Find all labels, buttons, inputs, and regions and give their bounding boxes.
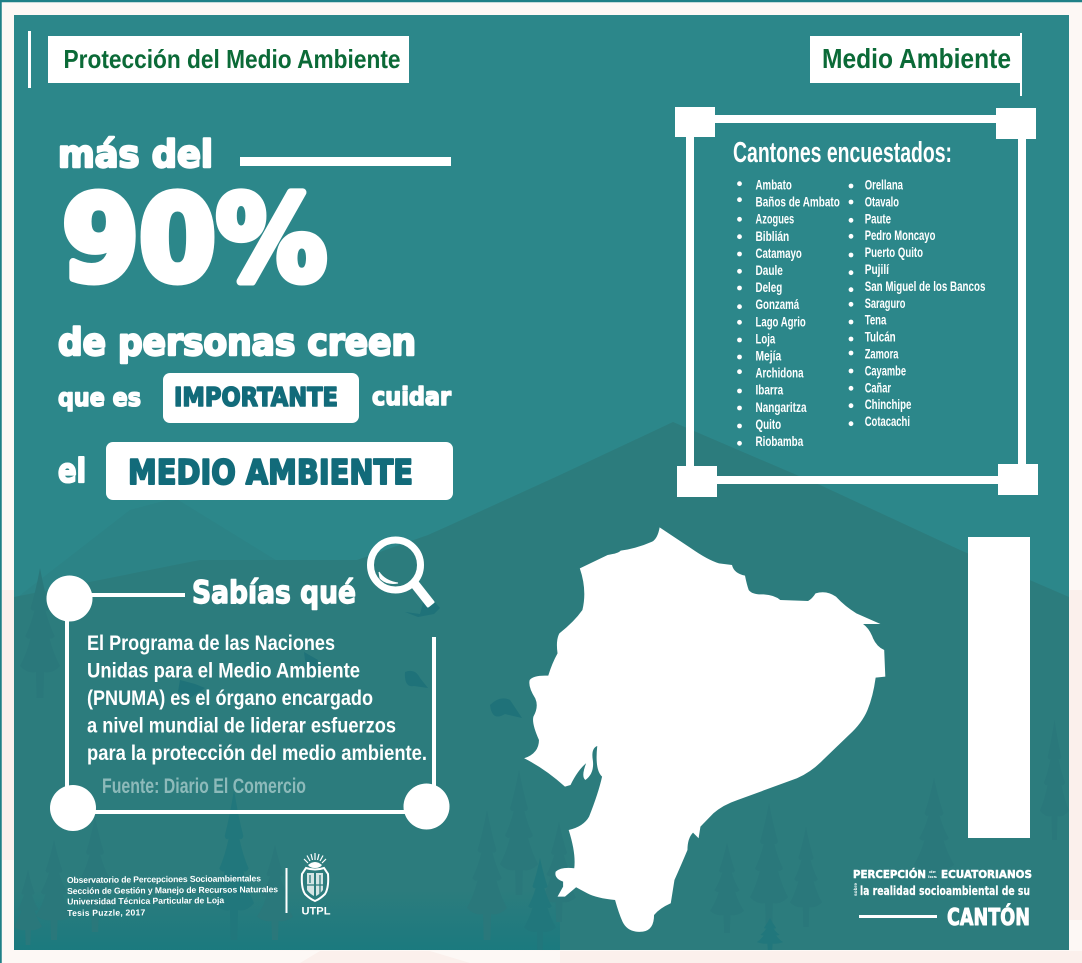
list: second column: Chinchipe xyxy=(865,396,912,412)
list: second column: Tulcán xyxy=(865,329,896,345)
list: second column: Pedro Moncayo xyxy=(865,227,935,243)
logo: UTPL xyxy=(302,853,331,918)
list: first column: Ibarra xyxy=(756,382,783,398)
footer credits xyxy=(67,873,279,918)
series title: Percepción de los ecuatorianos: ECUATORIANOS xyxy=(941,868,1032,881)
text block: PNUMA: El Programa de las Naciones xyxy=(87,632,335,655)
list: second column: Pujilí xyxy=(865,261,890,277)
list: first column: Biblián xyxy=(756,228,789,244)
heading: Protección del Medio Ambiente xyxy=(48,36,409,83)
list: first column: Gonzamá xyxy=(756,296,799,312)
dark foreground trees xyxy=(214,790,783,950)
list: first column: Catamayo xyxy=(756,245,802,261)
list: second column: Orellana xyxy=(865,176,903,192)
heading: Protección del Medio Ambiente: Protección del Medio Ambiente xyxy=(64,44,400,74)
series title: Percepción de los ecuatorianos: sobre xyxy=(853,882,858,896)
series title: Percepción de los ecuatorianos: los xyxy=(928,874,938,879)
list: second column: Cañar xyxy=(865,379,891,395)
series title: Percepción de los ecuatorianos: la realidad socioambiental de su xyxy=(860,884,1030,898)
list: first column: Daule xyxy=(756,262,783,278)
list: first column: Quito xyxy=(756,416,781,432)
text block: PNUMA: a nivel mundial de liderar esfuerzos xyxy=(87,714,396,738)
list: first column: Azogues xyxy=(756,211,794,227)
background trees xyxy=(14,568,1069,945)
list: second column: Tena xyxy=(865,312,887,328)
list: second column: Cotacachi xyxy=(865,413,910,429)
list heading: Cantones encuestados: xyxy=(733,137,952,169)
list: first column: Loja xyxy=(756,330,775,346)
panel: Sabías qué xyxy=(46,540,450,831)
callout frame xyxy=(46,576,450,831)
text block: PNUMA: para la protección del medio ambiente. xyxy=(87,742,427,765)
background birds xyxy=(178,592,522,718)
heading: Sabías qué: Sabías qué xyxy=(192,575,356,611)
left accent bar xyxy=(28,31,31,88)
footer divider xyxy=(286,868,288,913)
list: first column: Baños de Ambato xyxy=(756,194,840,210)
logo: UTPL: UTPL xyxy=(302,906,331,918)
series title: Percepción de los ecuatorianos: PERCEPCIÓN xyxy=(853,868,926,881)
series title: Percepción de los ecuatorianos: de xyxy=(929,869,937,874)
series title: Percepción de los ecuatorianos: CANTÓN xyxy=(947,903,1030,931)
list: second column: Cayambe xyxy=(865,362,906,378)
map: Ecuador xyxy=(524,527,885,932)
statement: el medio ambiente: MEDIO AMBIENTE xyxy=(128,453,413,493)
background mountains xyxy=(14,422,1069,950)
text block: PNUMA xyxy=(87,632,427,765)
footer credits: Universidad Técnica Particular de Loja xyxy=(67,895,224,906)
list frame xyxy=(675,107,1038,497)
heading: Medio Ambiente xyxy=(810,33,1022,96)
text block: PNUMA: Unidas para el Medio Ambiente xyxy=(87,660,360,682)
lower panel tint xyxy=(14,890,560,950)
blank white column xyxy=(968,537,1030,838)
list: second column: Otavalo xyxy=(865,193,899,209)
list: first column xyxy=(756,176,840,449)
statement: el medio ambiente xyxy=(58,442,453,500)
footer credits: Observatorio de Percepciones Socioambientales xyxy=(67,873,261,885)
list: second column: Puerto Quito xyxy=(865,244,923,260)
list: first column: Nangaritza xyxy=(756,399,807,415)
list: first column: Ambato xyxy=(756,176,792,192)
source note: Fuente: Diario El Comercio xyxy=(102,775,306,798)
icon: magnifying glass xyxy=(370,540,433,606)
footer credits: Tesis Puzzle, 2017 xyxy=(67,907,146,918)
faint margin trees xyxy=(2,590,1082,963)
statistic: más del 90%: 90% xyxy=(62,170,327,308)
distant mountain xyxy=(14,498,300,640)
panel: Cantones encuestados xyxy=(675,107,1038,497)
list: first column: Lago Agrio xyxy=(756,313,806,329)
list: first column: Archidona xyxy=(756,365,804,381)
statement: que es importante cuidar: cuidar xyxy=(372,382,452,411)
heading: Medio Ambiente: Medio Ambiente xyxy=(822,43,1011,74)
text block: PNUMA: (PNUMA) es el órgano encargado xyxy=(87,687,373,710)
list: second column xyxy=(865,176,986,429)
list: first column: Riobamba xyxy=(756,433,803,449)
series title: Percepción de los ecuatorianos xyxy=(853,868,1032,931)
footer credits: Sección de Gestión y Manejo de Recursos Naturales xyxy=(67,884,278,896)
statement: de personas creen: de personas creen xyxy=(58,321,416,364)
statement: que es importante cuidar xyxy=(58,373,452,423)
statement: que es importante cuidar: IMPORTANTE xyxy=(174,383,338,413)
list: first column: Deleg xyxy=(756,279,782,295)
list: second column: Saraguro xyxy=(865,295,905,311)
list: second column: Zamora xyxy=(865,346,899,362)
statistic: más del 90%: más del xyxy=(58,133,213,176)
list: first column: Mejía xyxy=(756,348,781,364)
statement: el medio ambiente: el xyxy=(58,451,86,490)
list bullets xyxy=(737,181,853,446)
statement: que es importante cuidar: que es xyxy=(58,383,141,412)
list: second column: San Miguel de los Bancos xyxy=(865,278,986,294)
statistic: más del 90% xyxy=(58,133,451,308)
list: second column: Paute xyxy=(865,210,891,226)
